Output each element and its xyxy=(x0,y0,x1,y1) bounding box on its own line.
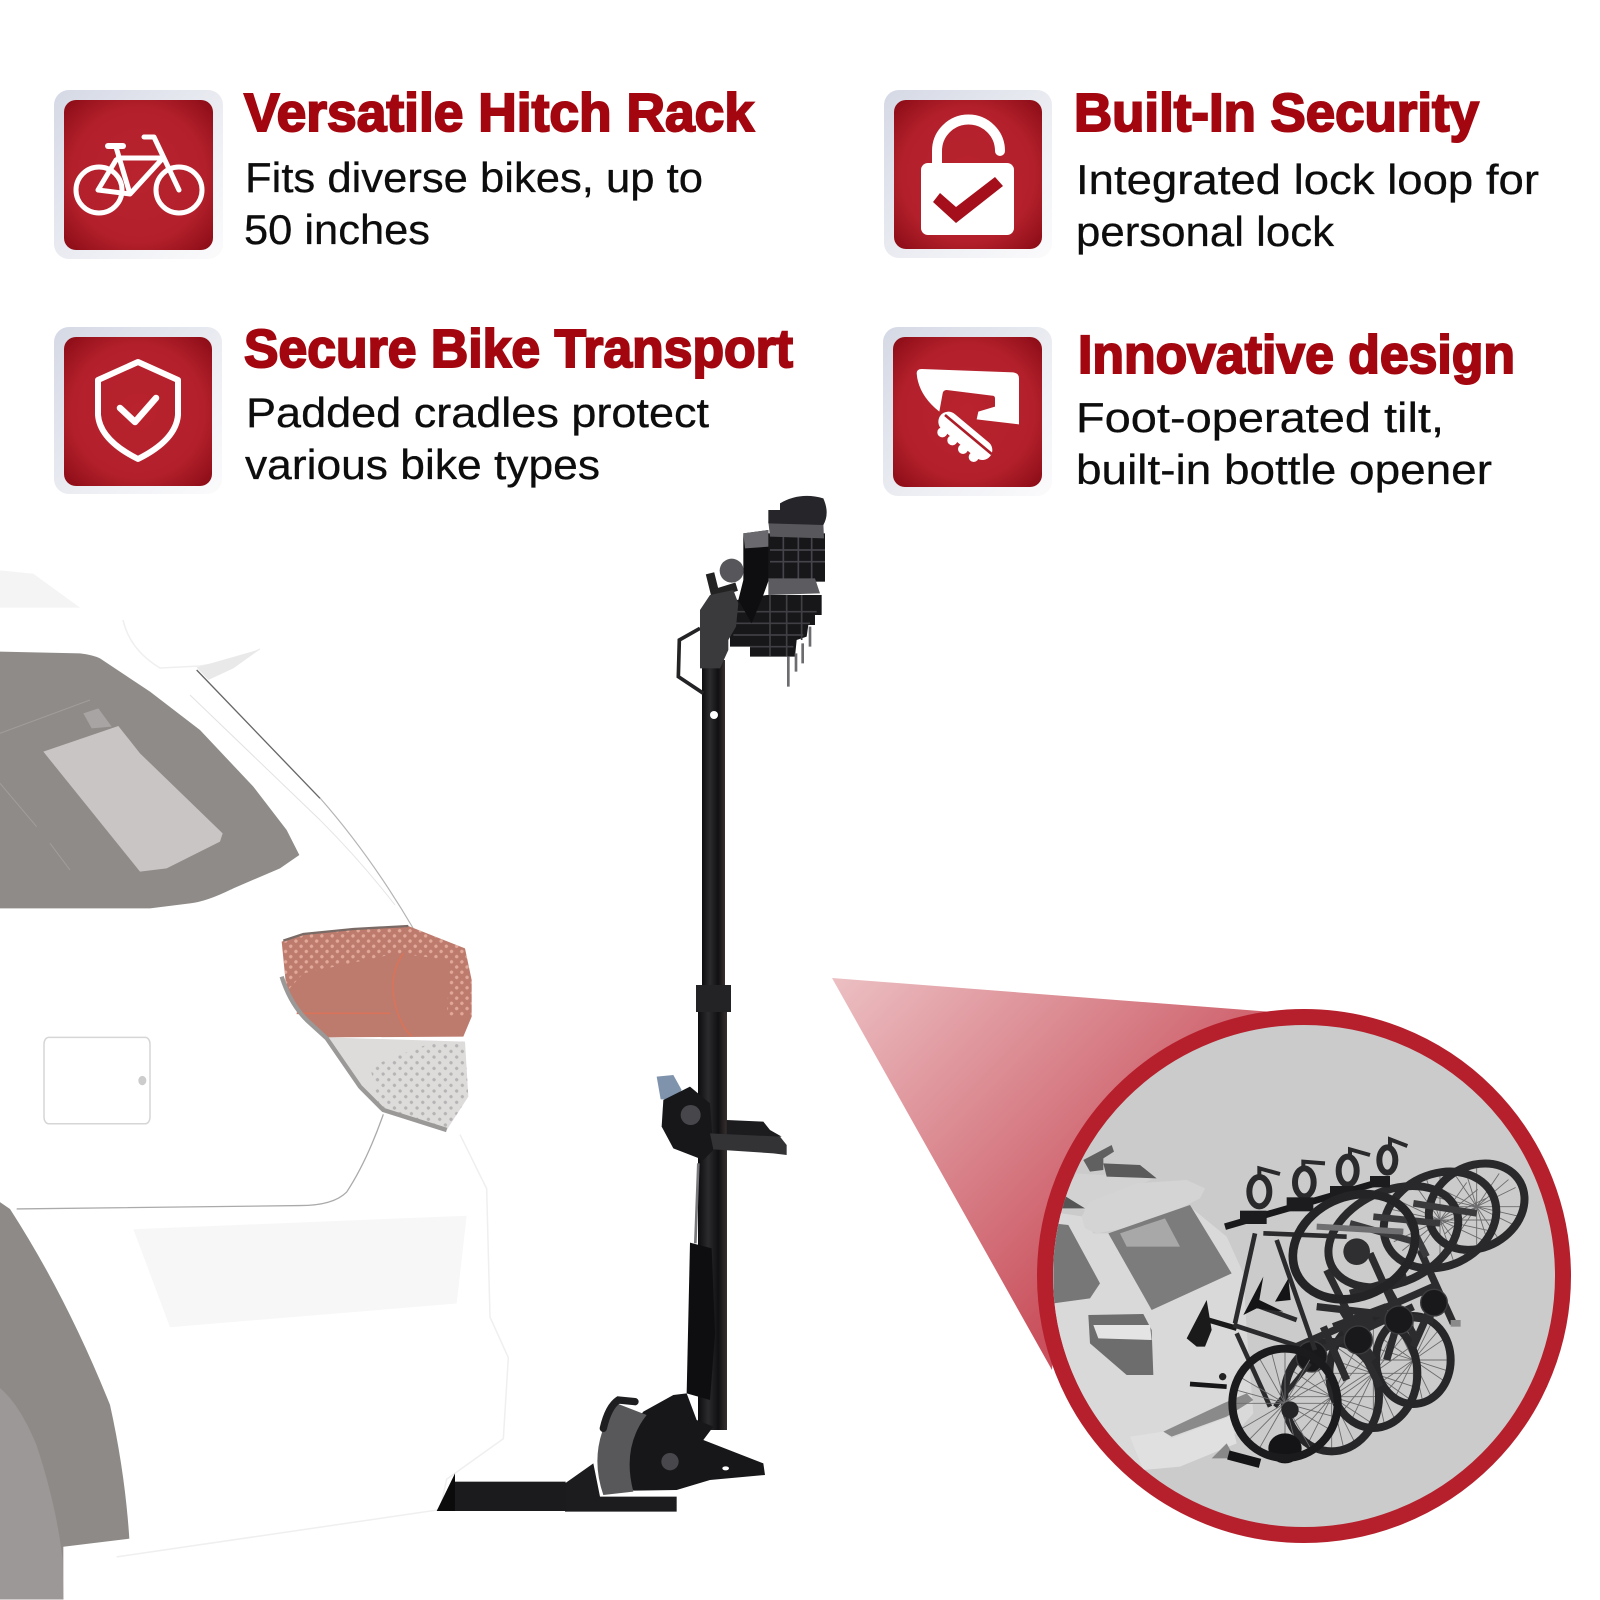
taillight trim xyxy=(282,977,447,1130)
pivot bolt xyxy=(661,1453,679,1470)
window highlight xyxy=(43,726,223,872)
icon tile: shield xyxy=(54,327,222,494)
spoiler outline xyxy=(123,620,260,668)
middle column cap xyxy=(743,530,769,548)
third saddle xyxy=(1275,1278,1291,1302)
inset roof xyxy=(1065,1178,1073,1199)
cradle grid lines xyxy=(733,595,817,657)
pivot plate xyxy=(607,1393,765,1491)
feature: Built-In Security xyxy=(884,83,1539,258)
inset rear window xyxy=(1108,1205,1232,1310)
taillight top edge xyxy=(283,926,408,941)
window reflection xyxy=(83,708,112,728)
taillight inner line xyxy=(297,953,412,1036)
bike frames mass xyxy=(1297,1250,1453,1387)
inset car body xyxy=(1040,1207,1253,1470)
taillight red lens xyxy=(282,926,472,1037)
inset roof dark piece xyxy=(1062,1196,1085,1208)
upper cradle block xyxy=(768,533,825,582)
hatch faint edge xyxy=(190,695,320,820)
foot pedal upper xyxy=(727,1120,782,1137)
feature: Secure Bike Transport xyxy=(54,319,793,494)
top strap xyxy=(768,496,827,525)
top bracket xyxy=(700,590,738,668)
front disc xyxy=(1343,1238,1370,1265)
description: Integrated lock loop for xyxy=(1076,156,1539,203)
rear wheel spokes xyxy=(1285,1317,1450,1450)
bumper shading xyxy=(133,1216,467,1327)
collar xyxy=(696,985,731,1012)
feature: Versatile Hitch Rack xyxy=(54,83,755,259)
inset spoiler xyxy=(1082,1180,1205,1233)
tyre xyxy=(0,1388,63,1599)
description: 50 inches xyxy=(244,206,430,253)
hitch rack product xyxy=(437,496,827,1512)
inset roof bar xyxy=(1083,1145,1114,1172)
lowest wheel spokes xyxy=(1235,1353,1335,1454)
clamp body xyxy=(662,1087,713,1160)
heading: Innovative design xyxy=(1078,325,1515,385)
clamp knob xyxy=(681,1105,701,1125)
blue release knob xyxy=(657,1075,682,1099)
icon tile: foot pedal xyxy=(883,327,1052,496)
dial knob xyxy=(603,1400,635,1428)
hatch edge continuation xyxy=(320,798,413,928)
body crease xyxy=(17,1114,383,1209)
taillight clear lens xyxy=(327,1037,468,1130)
front wheel spokes xyxy=(1387,1168,1522,1263)
saddle bar xyxy=(1208,1320,1237,1328)
description xyxy=(1076,156,1539,255)
heading: Secure Bike Transport xyxy=(244,319,793,379)
heading: Built-In Security xyxy=(1074,83,1479,143)
description: Fits diverse bikes, up to xyxy=(245,154,703,201)
rack lower pole xyxy=(698,1005,727,1430)
inset side window xyxy=(1053,1223,1100,1303)
mount hole xyxy=(722,1466,729,1470)
clear lens dots xyxy=(370,1042,468,1130)
grey angle dial xyxy=(597,1403,647,1495)
pedal xyxy=(1451,1320,1461,1327)
hitch receiver xyxy=(437,1473,455,1511)
lowest wheel xyxy=(1232,1349,1338,1458)
derailleur xyxy=(1281,1401,1299,1419)
side latch xyxy=(710,573,737,593)
description: personal lock xyxy=(1076,208,1335,255)
rear wheels xyxy=(1284,1316,1451,1451)
inset lower bumper xyxy=(1142,1434,1236,1470)
rack upper pole xyxy=(702,660,725,990)
hatch edge xyxy=(197,670,320,798)
rack locks xyxy=(1249,1139,1407,1206)
foot pedal arm xyxy=(710,1133,787,1155)
hanging bag xyxy=(1268,1433,1302,1463)
taillight dots xyxy=(282,926,472,1017)
roof rail xyxy=(0,570,80,608)
fuel door xyxy=(44,1037,150,1124)
upper wheels xyxy=(1324,1160,1528,1290)
inset bumper step xyxy=(1163,1393,1253,1437)
rear side window xyxy=(0,652,299,908)
upper grey bar xyxy=(768,522,824,538)
arm knob xyxy=(1219,1373,1226,1380)
carry handle xyxy=(678,628,703,693)
block grid xyxy=(770,535,825,580)
pole hole xyxy=(710,711,718,719)
zoom cone xyxy=(832,978,1272,1370)
chainrings xyxy=(1296,1289,1447,1372)
gas strut tube xyxy=(687,1243,715,1400)
icon tile: bike xyxy=(54,90,223,259)
inset hitch bracket xyxy=(1212,1444,1231,1458)
window interior lines xyxy=(0,700,90,870)
second saddle xyxy=(1243,1277,1283,1315)
inset roof rail xyxy=(1103,1163,1157,1178)
heading: Versatile Hitch Rack xyxy=(244,83,755,143)
icon tile: padlock xyxy=(884,90,1052,258)
description xyxy=(245,389,709,488)
hitch tube xyxy=(455,1482,566,1511)
feature: Innovative design xyxy=(883,325,1515,496)
gas strut rod xyxy=(695,1163,698,1243)
cradle tines xyxy=(788,627,810,687)
description xyxy=(1076,394,1492,493)
hatch inner continuation xyxy=(320,820,395,905)
middle column xyxy=(738,530,770,623)
description: Padded cradles protect xyxy=(246,389,709,436)
rack clamps xyxy=(1240,1176,1390,1224)
inset circle: car with four bikes xyxy=(1040,1017,1563,1535)
bumper outline xyxy=(117,1135,508,1557)
left saddle xyxy=(1187,1300,1212,1347)
inset window reflection xyxy=(1120,1218,1180,1247)
sleeve xyxy=(565,1463,677,1512)
description: built-in bottle opener xyxy=(1076,446,1492,493)
fuel door catch xyxy=(138,1076,146,1085)
description xyxy=(244,154,703,253)
upper wheel frames xyxy=(1350,1203,1477,1257)
handlebar rail xyxy=(1225,1180,1387,1227)
wheel arch xyxy=(0,1202,129,1599)
description: various bike types xyxy=(245,441,600,488)
cam knob xyxy=(720,559,744,583)
lower arm xyxy=(1190,1384,1227,1387)
inset taillight xyxy=(1088,1314,1153,1375)
front wheel tube xyxy=(1317,1227,1403,1232)
description: Foot-operated tilt, xyxy=(1076,394,1444,441)
front wheel xyxy=(1288,1190,1420,1304)
lower grey bar xyxy=(768,578,820,595)
car rear (faded) xyxy=(0,570,508,1599)
lower cradle stack xyxy=(730,595,822,657)
inset background and ring xyxy=(1045,1017,1563,1535)
lower hitch bar xyxy=(1228,1455,1260,1463)
spoiler shade xyxy=(197,649,260,680)
front-most frame xyxy=(1233,1233,1347,1407)
inset taillight clear xyxy=(1093,1325,1152,1340)
